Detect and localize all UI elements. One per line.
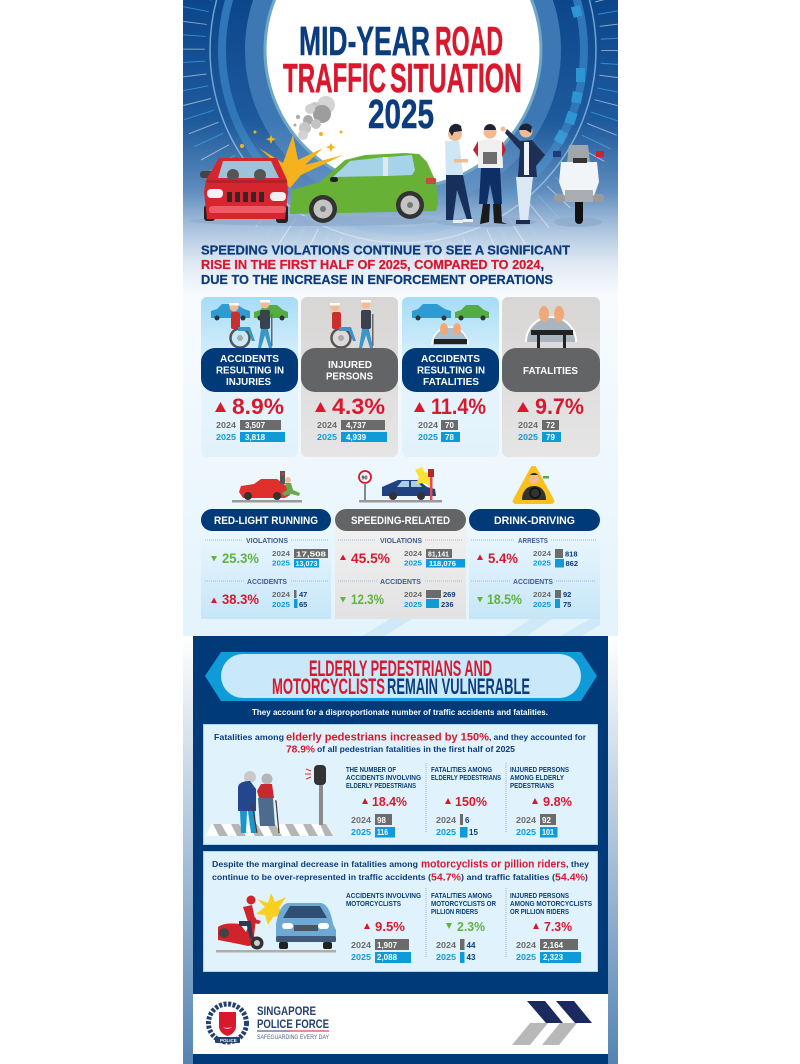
icon: cars and covered body xyxy=(412,304,489,345)
stat: accidents involving motorcyclists: MOTORCYCLISTS xyxy=(346,901,401,908)
panel: drink-driving: 818 xyxy=(565,550,578,558)
panel: accidents resulting in injuries: 8.9% xyxy=(232,394,284,419)
title: ROAD xyxy=(435,18,503,64)
panel: accidents resulting in injuries: 2024 xyxy=(216,421,237,430)
side strips xyxy=(183,636,618,1064)
panel: drink-driving: 2025 xyxy=(533,600,551,609)
panel: speeding-related: ACCIDENTS xyxy=(380,577,421,586)
panel: fatalities: FATALITIES xyxy=(523,365,578,377)
panel: drink-driving: 5.4% xyxy=(488,550,519,566)
stat: accidents involving elderly pedestrians: 98 xyxy=(377,816,386,825)
stat: fatalities among elderly pedestrians: FATALITIES AMONG xyxy=(431,767,492,774)
panel: fatalities: 79 xyxy=(546,433,555,442)
panel: injured persons: 2024 xyxy=(317,421,338,430)
icon: drink driving xyxy=(514,467,553,503)
panel: speeding-related: 12.3% xyxy=(351,591,384,607)
background xyxy=(183,0,618,640)
icon: speeding car: 90 xyxy=(362,476,368,482)
panel: motorcyclists: 54.4% xyxy=(555,872,585,884)
icon: injured people xyxy=(330,300,374,348)
panel: motorcyclists: , they xyxy=(566,859,589,869)
icon: red car xyxy=(200,158,288,223)
panel: elderly pedestrians: , and they accounted for xyxy=(489,732,587,742)
panel: drink-driving: 2024 xyxy=(533,549,552,558)
panel: red-light running: 47 xyxy=(299,590,307,599)
stat: accidents involving elderly pedestrians: ELDERLY PEDESTRIANS xyxy=(346,783,416,790)
stat: injured elderly pedestrians: INJURED PERSONS xyxy=(510,767,569,774)
stat: accidents involving motorcyclists: 9.5% xyxy=(375,919,405,934)
stat: injured motorcyclists: OR PILLION RIDERS xyxy=(510,909,569,916)
panel: elderly pedestrians: elderly pedestrians increased by 150% xyxy=(286,732,489,744)
stat: injured elderly pedestrians xyxy=(510,767,572,838)
panel: red-light running: 38.3% xyxy=(222,591,260,607)
banner heading xyxy=(205,652,597,701)
panel: motorcyclists: ) xyxy=(585,872,588,882)
panel: red-light running: 25.3% xyxy=(222,550,260,566)
panel: speeding-related xyxy=(335,509,466,619)
icon: man in blazer xyxy=(500,124,545,224)
panel: speeding-related: 81,141 xyxy=(428,550,449,558)
panel: accidents resulting in injuries: 3,818 xyxy=(245,433,266,442)
footer: SINGAPORE xyxy=(257,1004,316,1018)
banner heading: REMAIN VULNERABLE xyxy=(387,674,530,699)
panel: drink-driving: 18.5% xyxy=(487,591,522,607)
panel: injured persons: INJURED xyxy=(328,359,372,371)
panel: speeding-related: 2024 xyxy=(404,590,423,599)
panel: motorcyclists: Despite the marginal decrease in fatalities among xyxy=(212,859,418,869)
icon: police officer xyxy=(473,124,507,224)
panel: motorcyclists: continue to be over-represented in traffic accidents ( xyxy=(212,872,431,882)
panel: motorcyclists: motorcyclists or pillion riders xyxy=(421,858,566,870)
stat: injured motorcyclists: 2,164 xyxy=(543,941,564,950)
stat: fatalities among elderly pedestrians: ELDERLY PEDESTRIANS xyxy=(431,775,501,782)
stat: accidents involving elderly pedestrians: 116 xyxy=(377,828,388,837)
panel: elderly pedestrians: 78.9% xyxy=(286,744,315,756)
stat: fatalities among motorcyclists: 2.3% xyxy=(457,919,485,934)
panel: accidents resulting in injuries: RESULTING IN xyxy=(216,364,284,376)
stat: fatalities among motorcyclists: PILLION RIDERS xyxy=(431,909,478,916)
panel: injured persons: 4,737 xyxy=(346,421,367,430)
icon: police crest: POLICE xyxy=(220,1038,237,1043)
panel: accidents resulting in injuries xyxy=(201,297,298,457)
intro text: They account for a disproportionate number of traffic accidents and fatalities. xyxy=(252,707,548,717)
stat: accidents involving motorcyclists: 2025 xyxy=(351,953,372,962)
title: TRAFFIC xyxy=(283,55,386,101)
stat: injured elderly pedestrians: 2025 xyxy=(516,828,537,837)
panel: red-light running: 17,508 xyxy=(296,550,326,558)
panel: drink-driving: 92 xyxy=(563,590,571,599)
stat: accidents involving elderly pedestrians: THE NUMBER OF xyxy=(346,767,397,774)
stat: accidents involving motorcyclists: 2,088 xyxy=(377,953,398,962)
panel: red-light running: ACCIDENTS xyxy=(247,577,287,586)
footer: POLICE FORCE xyxy=(257,1017,329,1031)
panel: accidents resulting in fatalities: 2025 xyxy=(418,433,439,442)
panel: motorcyclists: 54.7% xyxy=(431,872,461,884)
icon: man in shirt xyxy=(445,124,473,223)
stat: injured motorcyclists: INJURED PERSONS xyxy=(510,893,569,900)
subheading: SPEEDING VIOLATIONS CONTINUE TO SEE A SIGNIFICANT xyxy=(201,242,570,258)
panel: accidents resulting in injuries: 3,507 xyxy=(245,421,266,430)
icon: police crest xyxy=(208,1004,246,1043)
panel: speeding-related: 236 xyxy=(441,600,454,609)
icon: elderly couple at crossing xyxy=(205,765,333,836)
panel: accidents resulting in fatalities xyxy=(402,297,499,457)
panel: red-light running: VIOLATIONS xyxy=(246,536,288,545)
icon: speeding car xyxy=(359,467,442,502)
stat: fatalities among motorcyclists: 44 xyxy=(466,941,476,950)
panel: speeding-related: 2024 xyxy=(404,549,423,558)
panel: red-light running: 2024 xyxy=(272,549,291,558)
panel: injured persons: 4.3% xyxy=(332,394,385,419)
stat: accidents involving motorcyclists: ACCIDENTS INVOLVING xyxy=(346,893,422,900)
panel: red-light running: RED-LIGHT RUNNING xyxy=(214,515,318,527)
title xyxy=(283,18,522,137)
icon: smoke xyxy=(294,96,335,140)
icon: stars xyxy=(240,130,342,152)
panel: drink-driving: ACCIDENTS xyxy=(513,577,553,586)
panel: red-light running: 65 xyxy=(299,600,307,609)
icon: police motorcycle xyxy=(553,145,604,224)
panel: injured persons: 2025 xyxy=(317,433,338,442)
panel: elderly pedestrians: of all pedestrian fatalities in the first half of 2025 xyxy=(317,744,515,754)
stat: injured motorcyclists: 2024 xyxy=(516,941,537,950)
stat: injured motorcyclists: 2,323 xyxy=(543,953,564,962)
stat: accidents involving elderly pedestrians: 18.4% xyxy=(372,794,407,809)
panel: drink-driving: DRINK-DRIVING xyxy=(494,515,575,527)
stat: fatalities among motorcyclists xyxy=(431,893,496,963)
panel: motorcyclists: ) and traffic fatalities ( xyxy=(461,872,555,882)
panel: drink-driving xyxy=(469,509,600,619)
icon: chevrons xyxy=(512,1001,592,1045)
panel: speeding-related: 2025 xyxy=(404,600,422,609)
stat: injured elderly pedestrians: PEDESTRIANS xyxy=(510,783,554,790)
stat: fatalities among motorcyclists: 2024 xyxy=(436,941,457,950)
stat: injured elderly pedestrians: 92 xyxy=(542,816,551,825)
panel: accidents resulting in fatalities: 2024 xyxy=(418,421,439,430)
stat: injured elderly pedestrians: 9.8% xyxy=(543,794,572,809)
panel: elderly pedestrians: Fatalities among xyxy=(214,732,284,742)
panel: accidents resulting in fatalities: RESULTING IN xyxy=(417,364,485,376)
stat: injured motorcyclists: 2025 xyxy=(516,953,537,962)
decorative diagonal streaks xyxy=(362,619,600,636)
subheading: DUE TO THE INCREASE IN ENFORCEMENT OPERATIONS xyxy=(201,272,553,287)
panel: speeding-related: 2025 xyxy=(404,558,422,568)
subheading xyxy=(201,242,570,287)
title: 2025 xyxy=(368,91,434,137)
stat: fatalities among motorcyclists: MOTORCYCLISTS OR xyxy=(431,901,496,908)
panel: speeding-related: 45.5% xyxy=(351,550,391,566)
stat: accidents involving motorcyclists xyxy=(346,893,422,963)
footer xyxy=(193,994,608,1054)
panel: accidents resulting in injuries: INJURIES xyxy=(226,376,271,388)
panel: fatalities xyxy=(502,297,600,457)
panel: injured persons: 4,939 xyxy=(346,433,367,442)
icon: ground shadows xyxy=(190,216,602,227)
subheading: RISE IN THE FIRST HALF OF 2025, COMPARED TO 2024, xyxy=(201,257,544,272)
stat: fatalities among elderly pedestrians: 2025 xyxy=(436,828,457,837)
icon: red-light running xyxy=(232,471,302,502)
icon: cars and injured people xyxy=(211,300,288,348)
panel: vulnerable road users xyxy=(193,636,608,1064)
panel: fatalities: 9.7% xyxy=(535,394,584,419)
stat: injured motorcyclists xyxy=(510,893,592,963)
icon: explosion xyxy=(259,135,343,188)
stat: fatalities among elderly pedestrians: 2024 xyxy=(436,816,457,825)
panel: accidents resulting in fatalities: FATALITIES xyxy=(423,376,479,388)
title: SITUATION xyxy=(390,55,522,101)
title: MID-YEAR xyxy=(299,18,430,64)
stat: injured elderly pedestrians: 2024 xyxy=(516,816,537,825)
icon: scooter hitting car xyxy=(216,893,336,952)
panel: red-light running: 2024 xyxy=(272,590,291,599)
panel: speeding-related: VIOLATIONS xyxy=(380,536,422,545)
panel: motorcyclists xyxy=(204,852,598,972)
stat: accidents involving elderly pedestrians: 2024 xyxy=(351,816,372,825)
panel: accidents resulting in injuries: 2025 xyxy=(216,433,237,442)
panel: drink-driving: 75 xyxy=(563,600,571,609)
panel: speeding-related: 269 xyxy=(443,590,456,599)
panel: drink-driving: 2024 xyxy=(533,590,552,599)
panel: injured persons xyxy=(301,297,398,457)
stat: injured elderly pedestrians: 101 xyxy=(542,828,554,837)
stat: fatalities among elderly pedestrians: 15 xyxy=(469,828,478,837)
stat: fatalities among motorcyclists: FATALITIES AMONG xyxy=(431,893,492,900)
stat: fatalities among elderly pedestrians xyxy=(431,767,501,838)
panel: injured persons: PERSONS xyxy=(326,370,373,382)
panel: fatalities: 2025 xyxy=(518,433,539,442)
footer: SAFEGUARDING EVERY DAY xyxy=(257,1035,329,1041)
stat: fatalities among motorcyclists: 43 xyxy=(466,953,476,962)
stat: accidents involving motorcyclists: 1,907 xyxy=(377,941,398,950)
panel: accidents resulting in injuries: ACCIDENTS xyxy=(220,353,279,365)
panel: red-light running: 2025 xyxy=(272,600,290,609)
banner heading: ELDERLY PEDESTRIANS AND xyxy=(309,656,492,681)
stat: fatalities among motorcyclists: 2025 xyxy=(436,953,457,962)
panel: elderly pedestrians xyxy=(204,724,598,844)
panel: accidents resulting in fatalities: 11.4% xyxy=(431,394,486,419)
panel: speeding-related: SPEEDING-RELATED xyxy=(351,515,450,527)
panel: red-light running: 2025 xyxy=(272,558,290,568)
panel: fatalities: 72 xyxy=(546,421,555,430)
panel: speeding-related: 118,076 xyxy=(429,559,456,568)
panel: drink-driving: 862 xyxy=(566,559,578,568)
icon: green car xyxy=(290,153,438,223)
stat: accidents involving elderly pedestrians: ACCIDENTS INVOLVING xyxy=(346,775,422,782)
stat: fatalities among elderly pedestrians: 6 xyxy=(465,816,470,825)
panel: red-light running xyxy=(201,509,331,619)
stat: injured motorcyclists: AMONG MOTORCYCLISTS xyxy=(510,901,592,908)
banner heading: MOTORCYCLISTS xyxy=(272,674,385,699)
icon: covered body on table xyxy=(526,306,576,348)
panel: fatalities: 2024 xyxy=(518,421,539,430)
stat: accidents involving motorcyclists: 2024 xyxy=(351,941,372,950)
panel: red-light running: 13,073 xyxy=(296,559,318,568)
panel: accidents resulting in fatalities: 78 xyxy=(445,433,454,442)
stat: injured elderly pedestrians: AMONG ELDERLY xyxy=(510,775,564,782)
stat: fatalities among elderly pedestrians: 150% xyxy=(455,794,487,809)
stat: accidents involving elderly pedestrians: 2025 xyxy=(351,828,372,837)
stat: injured motorcyclists: 7.3% xyxy=(544,919,572,934)
hero circular backdrop xyxy=(183,0,618,296)
stat: accidents involving elderly pedestrians xyxy=(346,767,422,838)
panel: drink-driving: ARRESTS xyxy=(518,536,548,545)
panel: accidents resulting in fatalities: 70 xyxy=(445,421,454,430)
panel: drink-driving: 2025 xyxy=(533,558,551,568)
panel: accidents resulting in fatalities: ACCIDENTS xyxy=(421,353,480,365)
